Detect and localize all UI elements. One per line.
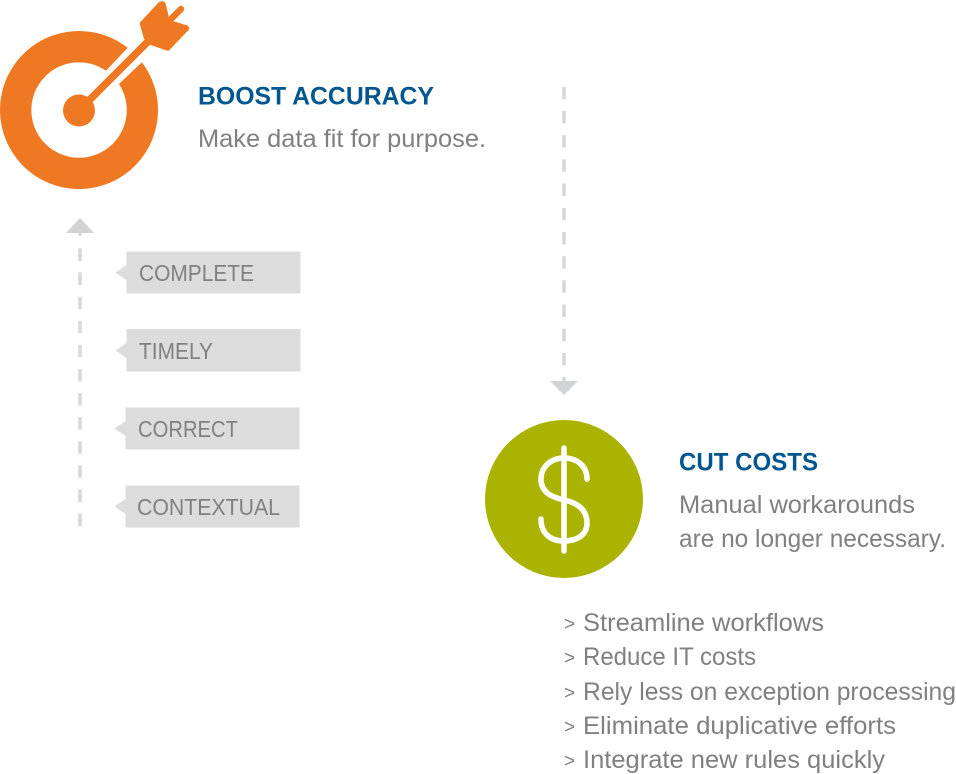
heading: boost accuracy: BOOST ACCURACY [198,82,434,110]
list: cost benefits [564,609,956,774]
arrow: dashed down arrow [550,87,578,395]
text: manual workarounds [679,491,946,553]
list: cost benefits: Rely less on exception processing [583,678,956,706]
tag: correct: CORRECT [138,416,238,442]
list: cost benefits: > [564,751,575,772]
icon: target with arrow [0,1,189,189]
icon: dollar coin [485,420,643,578]
tag: timely [116,329,300,372]
list: cost benefits: Eliminate duplicative efforts [583,712,896,740]
text: make data fit for purpose: Make data fit for purpose. [198,125,486,153]
tag: timely: TIMELY [139,338,213,364]
tag: contextual: CONTEXTUAL [137,494,280,520]
list: cost benefits: > [564,683,575,704]
tag: complete: COMPLETE [139,260,254,286]
heading: cut costs: CUT COSTS [679,448,818,476]
list: cost benefits: > [564,717,575,738]
list: cost benefits: > [564,648,575,669]
tag: correct [114,408,300,450]
list: cost benefits: Reduce IT costs [583,643,756,671]
arrow: dashed up arrow [66,218,94,526]
text: manual workarounds: Manual workarounds [679,491,915,519]
text: manual workarounds: are no longer necessary. [679,525,946,553]
tag: complete [116,252,300,294]
list: cost benefits: > [564,614,575,635]
list: cost benefits: Streamline workflows [583,609,824,637]
list: cost benefits: Integrate new rules quickly [583,746,886,774]
tag: contextual [114,486,300,528]
